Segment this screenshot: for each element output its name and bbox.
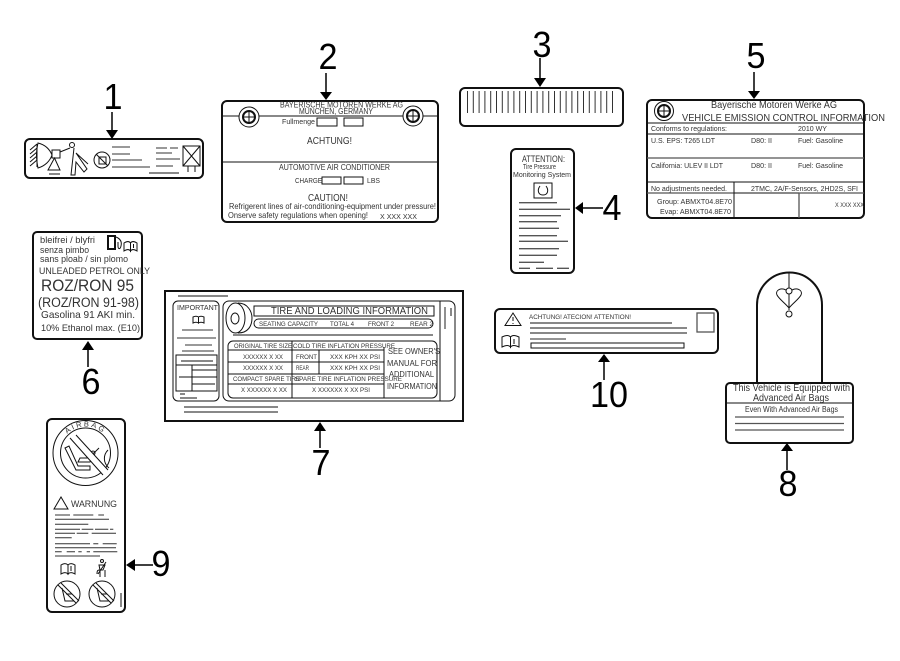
icon: book bbox=[124, 242, 137, 251]
icon: warning triangle bbox=[54, 497, 68, 509]
label 6: fuel information bbox=[33, 232, 150, 339]
number 4 with arrow: 4 bbox=[602, 187, 622, 228]
table: tire inflation: SEE OWNER'S bbox=[388, 346, 440, 356]
label 5: vehicle emission control: California: ULEV II LDT bbox=[651, 163, 724, 170]
label 10: multi-language attention: ACHTUNG! ATECION! ATTENTION! bbox=[529, 315, 631, 321]
icon: book bbox=[502, 336, 519, 347]
label 4: tire pressure monitoring: Monitoring System bbox=[513, 170, 571, 179]
number 5 with arrow bbox=[746, 35, 766, 99]
number 10 with arrow: 10 bbox=[590, 374, 628, 415]
icon: right seat prohibition bbox=[89, 581, 115, 607]
panel: important: IMPORTANT bbox=[177, 303, 218, 312]
label 6: fuel information: bleifrei / blyfri bbox=[40, 235, 95, 245]
label 4: tire pressure monitoring bbox=[511, 149, 574, 273]
label 2: air conditioner: BAYERISCHE MOTOREN WERKE AG bbox=[280, 100, 403, 110]
panel: tire and loading: SEATING CAPACITY bbox=[259, 321, 319, 328]
label 5: vehicle emission control: Bayerische Motoren Werke AG bbox=[711, 99, 837, 111]
panel: tire and loading: TOTAL 4 bbox=[330, 321, 354, 328]
table: tire inflation: XXXXXX X XX bbox=[243, 354, 284, 361]
label 2: air conditioner: MUNCHEN, GERMANY bbox=[299, 107, 374, 116]
panel: tire and loading: TIRE AND LOADING INFORMATION bbox=[271, 305, 428, 317]
number 5 with arrow: 5 bbox=[746, 35, 766, 76]
table: tire inflation: FRONT bbox=[296, 354, 317, 361]
label 7: tire and loading information bbox=[165, 291, 463, 421]
label 6: fuel information: senza pimbo bbox=[40, 245, 89, 255]
number 6 with arrow bbox=[82, 341, 100, 402]
icon: book bbox=[193, 316, 204, 323]
icon: person at pump bbox=[48, 142, 88, 175]
table: tire inflation: INFORMATION bbox=[387, 381, 437, 391]
icon: right logo bbox=[403, 106, 423, 126]
table: tire inflation: ORIGINAL TIRE SIZE bbox=[234, 343, 293, 350]
number 2 with arrow bbox=[318, 36, 338, 100]
label 10: multi-language attention bbox=[495, 309, 718, 353]
label 2: air conditioner: CAUTION! bbox=[308, 193, 348, 204]
label 5: vehicle emission control: Fuel: Gasoline bbox=[798, 163, 843, 170]
label 1: warning pictograms bbox=[25, 139, 203, 178]
label 2: air conditioner: Fullmenge bbox=[282, 117, 315, 126]
icon: logo bbox=[654, 102, 674, 120]
table: tire inflation: XXXXXX X XX bbox=[243, 365, 284, 372]
label 8: air bag hang tag: Advanced Air Bags bbox=[753, 392, 829, 404]
label 5: vehicle emission control: No adjustments needed. bbox=[651, 186, 727, 193]
label 2: air conditioner: ACHTUNG! bbox=[307, 136, 352, 147]
number 8 with arrow bbox=[778, 443, 798, 504]
icon: tire bbox=[226, 303, 252, 333]
label 5: vehicle emission control: Conforms to regulations: bbox=[651, 126, 727, 133]
icon: book bbox=[61, 564, 75, 574]
icon: warning triangle bbox=[505, 313, 521, 326]
label 9: airbag warning bbox=[46, 418, 126, 613]
table: tire inflation: MANUAL FOR bbox=[387, 358, 437, 368]
label 6: fuel information: 10% Ethanol max. (E10) bbox=[41, 323, 140, 334]
label 8: air bag hang tag: Even With Advanced Air Bags bbox=[745, 405, 838, 414]
panel: important bbox=[173, 301, 219, 401]
label 2: air conditioner bbox=[222, 100, 438, 222]
label 6: fuel information: ROZ/RON 95 bbox=[41, 277, 134, 295]
label 2: air conditioner: X XXX XXX bbox=[380, 212, 417, 221]
number 3 with arrow bbox=[532, 24, 552, 87]
icon: left seat prohibition bbox=[54, 581, 80, 607]
label 2: air conditioner: LBS bbox=[367, 176, 380, 185]
label 6: fuel information: sans ploab / sin plomo bbox=[40, 254, 128, 264]
number 1 with arrow bbox=[104, 76, 122, 139]
icon: left logo bbox=[239, 107, 259, 127]
icon: airbag prohibition: AIRBAG bbox=[66, 421, 104, 434]
table: tire inflation: XXX KPH XX PSI bbox=[330, 354, 380, 361]
warning text lines bbox=[55, 515, 117, 556]
text lines bbox=[112, 147, 180, 167]
table: tire inflation: SPARE TIRE INFLATION PRESSURE bbox=[295, 376, 403, 383]
label 6: fuel information: Gasolina 91 AKI min. bbox=[41, 309, 135, 321]
label 2: air conditioner: AUTOMOTIVE AIR CONDITIONER bbox=[279, 163, 390, 172]
label 2: air conditioner: Onserve safety regulations when opening! bbox=[228, 210, 368, 220]
number 2 with arrow: 2 bbox=[318, 36, 338, 77]
label 4: tire pressure monitoring: Tire Pressure bbox=[523, 162, 556, 171]
label 5: vehicle emission control: X XXX XXX bbox=[835, 203, 864, 209]
icon: tag hanger bbox=[757, 272, 822, 383]
number 1 with arrow: 1 bbox=[104, 76, 122, 117]
icon: prohibition circle bbox=[94, 152, 110, 168]
icon: hatched wall and dish bbox=[30, 143, 52, 168]
label 6: fuel information: (ROZ/RON 91-98) bbox=[38, 295, 139, 310]
label 2: air conditioner: CHARGE bbox=[295, 176, 322, 185]
table: tire inflation bbox=[228, 341, 440, 398]
label 5: vehicle emission control: Group: ABMXT04.8E70 bbox=[657, 199, 732, 206]
icon: tire pressure bbox=[534, 183, 552, 198]
number 8 with arrow: 8 bbox=[778, 463, 798, 504]
table: tire inflation: X XXXXXX X XX PSI bbox=[312, 387, 370, 394]
label 8: air bag hang tag: This Vehicle is Equipped with bbox=[733, 382, 850, 394]
table: tire inflation: X XXXXXX X XX bbox=[241, 387, 288, 394]
number 6 with arrow: 6 bbox=[82, 361, 100, 402]
number 9 with arrow: 9 bbox=[152, 543, 170, 584]
panel: tire and loading: REAR 2 bbox=[410, 321, 433, 328]
icon: crossed box bbox=[183, 146, 200, 172]
label 5: vehicle emission control: Evap: ABMXT04.8E70 bbox=[660, 209, 731, 216]
label 8: air bag hang tag bbox=[726, 272, 853, 443]
table: tire inflation: XXX KPH XX PSI bbox=[330, 365, 380, 372]
number 9 with arrow bbox=[126, 543, 170, 584]
number 7 with arrow: 7 bbox=[312, 442, 330, 483]
label 5: vehicle emission control: 2TMC, 2A/F-Sensors, 2HD2S, SFI bbox=[751, 186, 858, 193]
seat and occupant bbox=[65, 446, 109, 470]
number 7 with arrow bbox=[312, 422, 330, 483]
label 9: airbag warning: WARNUNG bbox=[71, 499, 117, 510]
number 4 with arrow bbox=[575, 187, 622, 228]
table: tire inflation: COMPACT SPARE TIRE bbox=[233, 376, 301, 383]
table: tire inflation: REAR bbox=[296, 365, 309, 372]
label 5: vehicle emission control: D80: II bbox=[751, 163, 772, 170]
table: tire inflation: COLD TIRE INFLATION PRESSURE bbox=[293, 343, 396, 350]
label 2: air conditioner: Refrigerent lines of air-conditioning-equipment under pressure! bbox=[229, 201, 436, 211]
number 10 with arrow bbox=[590, 354, 628, 415]
table: tire inflation: ADDITIONAL bbox=[389, 369, 434, 379]
panel: tire and loading: FRONT 2 bbox=[368, 321, 394, 328]
number 3 with arrow: 3 bbox=[532, 24, 552, 65]
icon: airbag prohibition bbox=[52, 420, 118, 486]
label 4: tire pressure monitoring: ATTENTION: bbox=[522, 154, 565, 165]
label 5: vehicle emission control: D80: II bbox=[751, 138, 772, 145]
icon: fuel pump bbox=[108, 236, 121, 249]
panel: tire and loading bbox=[223, 301, 455, 401]
label 6: fuel information: UNLEADED PETROL ONLY bbox=[39, 266, 150, 276]
label 5: vehicle emission control: U.S. EPS: T265 LDT bbox=[651, 138, 716, 145]
icon: seated person bbox=[97, 560, 106, 577]
label 3: barcode strip bbox=[460, 88, 623, 126]
label 5: vehicle emission control: Fuel: Gasoline bbox=[798, 138, 843, 145]
label 5: vehicle emission control bbox=[647, 99, 885, 218]
label 5: vehicle emission control: 2010 WY bbox=[798, 126, 827, 133]
